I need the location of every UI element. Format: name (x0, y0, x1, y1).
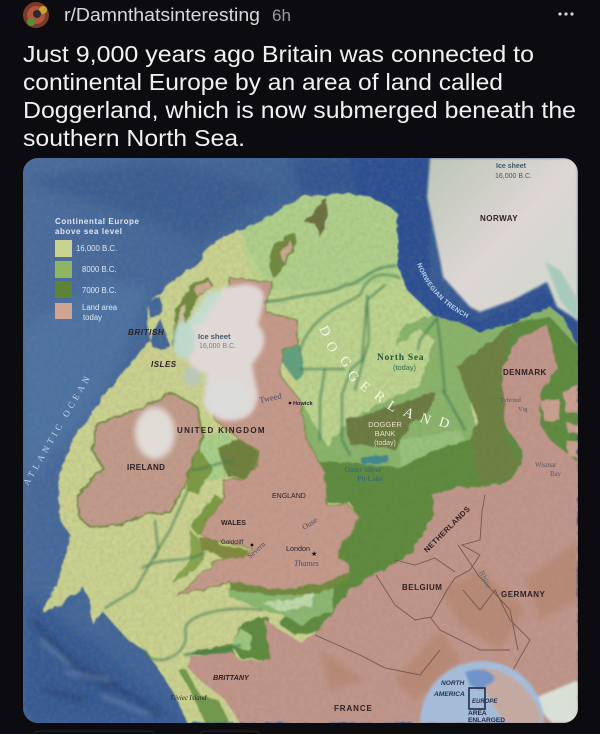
place and river labels: Tybrind (500, 397, 521, 404)
Ice sheet: Norway (427, 158, 578, 320)
legend labels: 16,000 B.C. (76, 244, 117, 253)
label: Outer Silver Pit Lake: Outer Silver (344, 466, 382, 474)
place and river labels: Wismar (535, 462, 557, 469)
place and river labels (170, 390, 562, 702)
label: Atlantic Ocean: ATLANTIC OCEAN (21, 371, 94, 487)
panel: map of Doggerland (23, 158, 578, 723)
green: Irish Sea edges (190, 495, 223, 535)
label: Outer Silver Pit Lake (344, 467, 382, 481)
legend heading: Continental Europe (55, 217, 140, 226)
label: Dogger Bank (368, 422, 402, 446)
title: southern North Sea. (23, 125, 245, 151)
place and river labels: Vig (518, 406, 528, 413)
place and river labels: Ouse (300, 515, 319, 532)
label: Norwegian Trench: NORWEGIAN TRENCH (417, 262, 469, 318)
legend heading (55, 218, 139, 234)
label: Dogger Bank: DOGGER (368, 420, 402, 429)
place and river labels: Howick (293, 401, 313, 407)
inset globe: ENLARGED (468, 717, 505, 724)
seabed ridges (32, 620, 160, 715)
legend heading: above sea level (55, 227, 122, 236)
country labels: IRELAND (127, 463, 165, 472)
label: Dogger Bank: BANK (375, 429, 395, 438)
icon: avatar (23, 2, 49, 28)
label: Doggerland: R (371, 388, 388, 406)
deep water: Norwegian Trench (351, 158, 501, 331)
inset labels (434, 680, 498, 703)
land today: continental Europe (188, 325, 578, 723)
title: Just 9,000 years ago Britain was connected to (23, 41, 534, 67)
legend labels: 7000 B.C. (82, 286, 117, 295)
Ice sheet over Scotland (173, 284, 264, 421)
inset labels: EUROPE (472, 699, 498, 705)
label: North Sea (377, 353, 424, 372)
place and river labels: Rhine (477, 569, 494, 591)
shaded relief: continent (320, 540, 578, 700)
bottom interface hints (34, 731, 260, 733)
label: North Sea: (today) (393, 363, 416, 372)
label: Outer Silver Pit Lake: Pit Lake (357, 475, 383, 483)
ice sheet labels: Ice sheet (198, 332, 231, 341)
land: exposed 16,000 B.C. (42, 193, 578, 723)
label: Doggerland: E (356, 379, 373, 396)
inset globe: AREA (468, 710, 487, 717)
land today: Danish islands (540, 400, 560, 422)
legend swatches (55, 240, 72, 319)
Ice sheet over Ireland (135, 407, 175, 459)
place and river labels: Thames (294, 559, 319, 568)
place and river labels: ★ (311, 550, 317, 558)
rivers (105, 266, 465, 660)
label: Doggerland: D (315, 324, 333, 339)
subreddit name: r/Damnthatsinteresting (64, 5, 260, 25)
legend labels: today (83, 313, 102, 322)
country labels: BRITTANY (213, 673, 250, 682)
place and river labels: Bay (550, 471, 562, 478)
country labels: DENMARK (503, 368, 547, 377)
title: Doggerland, which is now submerged beneath the (23, 97, 576, 123)
label: Doggerland (315, 324, 451, 432)
legend labels (76, 244, 118, 322)
icon: more menu (558, 12, 574, 16)
dark green: exposed 7000 B.C. (280, 317, 578, 635)
Ice sheet: eastern Baltic corner (537, 679, 578, 723)
country labels: BELGIUM (402, 583, 442, 592)
ice sheet labels (198, 163, 532, 350)
medium green: exposed 8000 B.C. (325, 307, 578, 475)
inset labels: AMERICA (433, 691, 465, 698)
label: Doggerland: O (322, 339, 340, 355)
place and river labels: Téviec Island (170, 695, 207, 702)
ice sheet labels: 16,000 B.C. (495, 173, 532, 180)
legend labels: Land area (82, 303, 118, 312)
country labels: NETHERLANDS (422, 504, 472, 554)
label: Doggerland: G (344, 368, 362, 385)
map grain texture (23, 158, 578, 723)
country labels: NORWAY (480, 214, 518, 223)
place and river labels: London (286, 544, 310, 553)
country labels: ENGLAND (272, 493, 306, 500)
Norway coastal water tint (545, 262, 578, 322)
country labels: UNITED KINGDOM (177, 426, 266, 435)
country labels: FRANCE (334, 704, 373, 713)
country labels: WALES (221, 520, 246, 527)
country labels: ISLES (151, 360, 177, 369)
header: post info (23, 2, 574, 28)
legend (55, 217, 140, 322)
label: Doggerland: G (336, 354, 354, 370)
inset: enlarged area box (469, 688, 485, 709)
label: Doggerland: N (418, 411, 433, 429)
ice sheet labels: Ice sheet (496, 163, 527, 170)
country labels (127, 214, 547, 713)
lake: Outer Silver Pit (360, 455, 388, 464)
post age: 6h (272, 6, 291, 25)
land today: Outer Hebrides and northern isles (172, 277, 213, 347)
legend labels: 8000 B.C. (82, 265, 117, 274)
country labels: BRITISH (128, 328, 164, 337)
place and river labels: Severn (245, 540, 267, 560)
place and river labels: Tweed (258, 390, 283, 405)
label: Doggerland: A (401, 405, 417, 423)
country labels: GERMANY (501, 590, 546, 599)
light green: Doggerland plain (242, 240, 434, 446)
label: Dogger Bank: (today) (374, 440, 396, 447)
inset globe (420, 661, 544, 724)
land today: Scotland and England (178, 278, 360, 595)
borders (315, 495, 530, 675)
channel: green lowlands south of England (228, 588, 334, 626)
ice sheet labels: 16,000 B.C. (199, 343, 236, 350)
label: North Sea: North Sea (377, 353, 424, 363)
label: Doggerland: L (384, 398, 399, 416)
land today: Ireland (77, 393, 203, 527)
sea (23, 158, 578, 723)
label: Doggerland: D (437, 415, 451, 432)
title (23, 41, 576, 151)
inset labels: NORTH (441, 680, 465, 687)
place and river labels: Goldcliff (221, 539, 244, 546)
title: continental Europe by an area of land called (23, 69, 503, 95)
